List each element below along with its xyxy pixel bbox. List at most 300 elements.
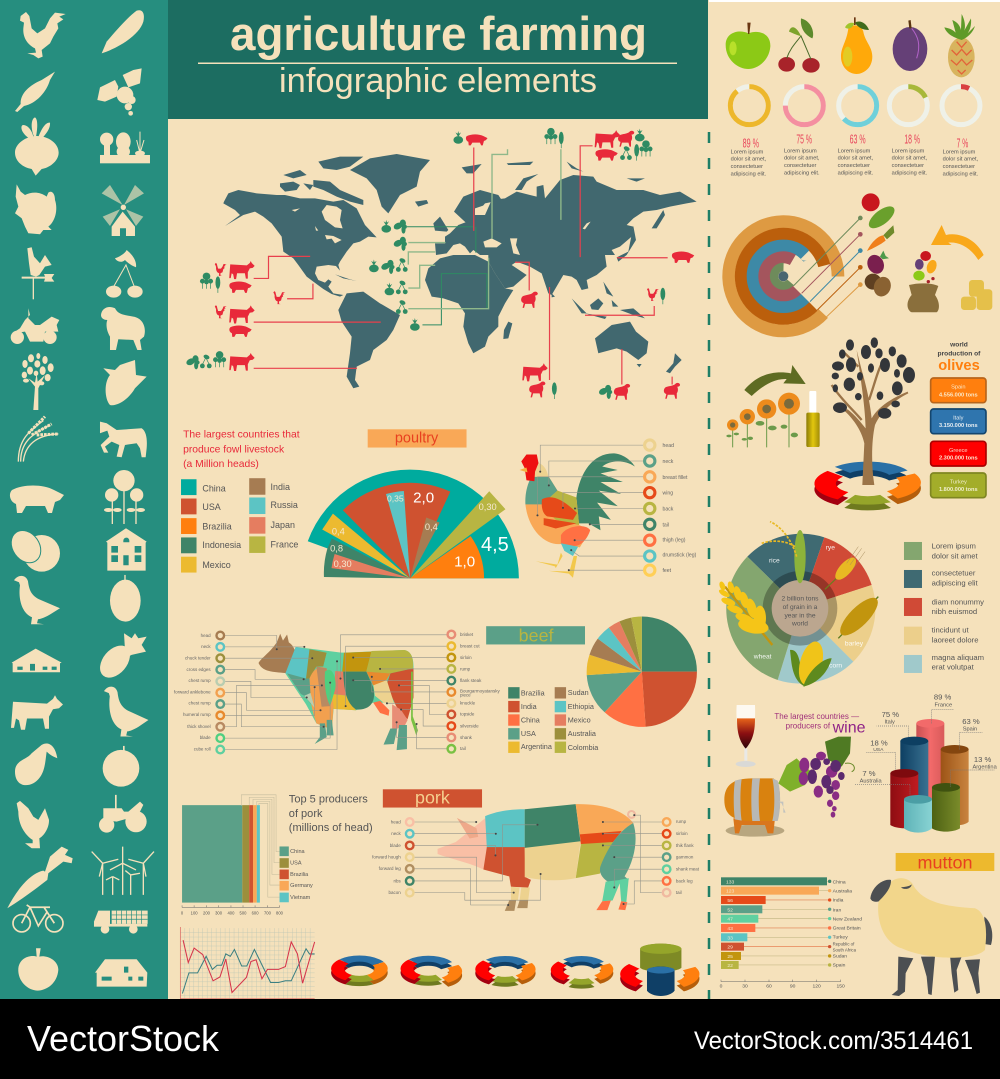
grain legend: consectetuer: [932, 569, 976, 578]
percent values: 63 %: [850, 133, 866, 147]
poultry fan chart: 0,8: [330, 544, 343, 554]
icon: green arrow: [744, 365, 806, 396]
icon: wheat ear: [15, 72, 55, 112]
mutton bar chart: 150: [836, 984, 845, 990]
wine cylinders chart: 75 %: [882, 710, 899, 719]
grain legend: laoreet dolore: [932, 635, 978, 644]
sidebar: farm icons: [0, 0, 168, 999]
grain legend: adipiscing elit: [932, 578, 978, 587]
poultry fan chart: 2,0: [413, 490, 434, 507]
footer logo: VectorStock: [27, 1018, 220, 1059]
mutton bar chart: 90: [790, 984, 796, 990]
icon: corn: [103, 360, 147, 405]
olives heading: [938, 342, 981, 374]
icon: grapes and leaves: [778, 737, 854, 818]
poultry fan chart: 0,35: [387, 493, 404, 503]
lorem captions: adipiscing elit.: [892, 170, 928, 176]
grain legend: magna aliquam: [932, 653, 984, 662]
lorem captions: dolor sit amet,: [943, 157, 979, 163]
mutton bar chart: Republic of: [833, 941, 855, 946]
olives stat: Greece: Greece: [949, 448, 968, 454]
pork section and bottom row: [180, 787, 701, 999]
icon: weathervane: [22, 247, 54, 299]
mutton bar chart: 56: [727, 898, 733, 904]
icon: tree: [22, 353, 54, 410]
cow cuts diagram: forward anklebone: [174, 690, 211, 695]
poultry fan chart: 0,4: [332, 526, 345, 536]
icon: pear: [15, 743, 57, 785]
percent values: 7 %: [957, 136, 968, 150]
pork stacked bar chart: 200: [203, 911, 211, 916]
icon: cottage: [95, 959, 147, 987]
cow cuts diagram: chest rump: [189, 701, 211, 706]
pork stacked bar chart: 700: [264, 911, 272, 916]
pork stacked bar chart: 300: [215, 911, 223, 916]
icon: sunflowers: [726, 393, 800, 447]
pork banner: [383, 787, 482, 808]
poultry section: [181, 429, 697, 578]
icon: wine glass: [736, 705, 756, 767]
mutton bar chart: South Africa: [833, 947, 857, 952]
icon: goose: [14, 576, 60, 624]
pork stacked bar chart: Brazilia: [290, 872, 309, 878]
lorem captions: dolor sit amet,: [731, 157, 767, 163]
poultry legend: France: [271, 539, 298, 549]
icon: cucumber: [102, 10, 144, 53]
icon: carrot: [7, 847, 73, 908]
grain wheel chart: world: [791, 621, 808, 628]
world map land: Europe, Africa, Asia, Australia: [425, 162, 697, 373]
pig cuts diagram: ribs: [394, 878, 402, 883]
icon: barn: [12, 649, 62, 672]
red livestock markers: [215, 130, 694, 400]
mutton bar chart: China: [833, 879, 846, 885]
grain legend: erat volutpat: [932, 663, 975, 672]
footer bar: [0, 999, 1000, 1079]
olives heading: production of: [938, 351, 981, 358]
icon: sunflowers: [104, 470, 145, 524]
lorem captions: adipiscing elit.: [784, 170, 820, 176]
cow cuts diagram: blade: [200, 735, 211, 740]
percent values: 75 %: [796, 133, 812, 147]
pig cuts diagram: shank meat: [676, 867, 700, 872]
beef banner: [486, 625, 585, 645]
lorem captions: Lorem ipsum: [892, 148, 925, 154]
green crop markers: [185, 128, 665, 399]
icon: green apple: [726, 23, 770, 69]
icon: gold coins: [961, 280, 992, 310]
poultry banner: [368, 429, 467, 448]
beef legend: Sudan: [568, 688, 589, 697]
mutton bar chart: 29: [727, 945, 733, 951]
grain wheel chart: 2 billion tons: [781, 596, 819, 603]
beef banner: beef: [519, 625, 554, 645]
cow cuts diagram: chest rump: [189, 678, 211, 683]
mutton bar chart: 123: [726, 889, 735, 895]
icon: grapes: [97, 68, 142, 116]
rooster cuts diagram: head: [662, 443, 674, 449]
grain legend: diam nonummy: [932, 597, 984, 606]
cow cuts diagram: rump: [460, 666, 471, 671]
grain wheel chart: corn: [829, 663, 842, 670]
percent values: [743, 133, 968, 150]
icon: wheat: [718, 581, 772, 645]
olives stat: Spain: 4.556.000 tons: [939, 392, 978, 398]
icon: sheep: [101, 307, 145, 350]
pork stacked bar chart: Vietnam: [290, 895, 311, 901]
olives stat: Turkey: 1.800.000 tons: [939, 487, 978, 493]
olives stat: Spain: [931, 378, 986, 403]
wine cylinders chart: 63 %: [962, 717, 980, 726]
wine cylinders chart: 18 %: [870, 739, 888, 748]
pig cuts diagram: neck: [391, 831, 401, 836]
olives stat: Turkey: Turkey: [950, 480, 967, 486]
rooster cuts diagram: back: [662, 507, 674, 513]
poultry heading text: [183, 430, 300, 470]
beef legend: India: [521, 702, 538, 711]
olives stat: Turkey: [931, 473, 986, 498]
mutton bar chart: Spain: [833, 962, 846, 968]
lorem captions: consectetuer: [943, 164, 975, 170]
beef legend: Argentina: [521, 742, 553, 751]
line chart: [180, 927, 315, 999]
icon: orange arrow: [931, 225, 984, 260]
pig cuts diagram: tail: [676, 890, 682, 895]
grain legend: [904, 542, 984, 673]
poultry fan chart: 0,30: [479, 502, 497, 512]
mutton bar chart: Sudan: [833, 954, 847, 960]
pork chart title: of pork: [289, 808, 323, 820]
cow cuts diagram: head: [201, 633, 211, 638]
subtitle: infographic elements: [279, 62, 597, 100]
icon: rice: [762, 522, 806, 583]
wine cylinders chart: France: [935, 702, 952, 708]
olives stat: Greece: [931, 441, 986, 466]
lorem captions: adipiscing elit.: [731, 171, 767, 177]
icon: duck: [104, 687, 148, 737]
pork stacked bar chart: Germany: [290, 883, 313, 889]
icon: turkey: [15, 184, 56, 234]
cow cuts diagram: knuckle: [460, 701, 476, 706]
cow cuts diagram: [174, 631, 500, 753]
grain legend: nibh euismod: [932, 607, 977, 616]
icon: olive tree: [832, 337, 915, 485]
icon: barrel: [724, 778, 786, 837]
percent values: 89 %: [743, 136, 759, 150]
icon: rice: [18, 417, 58, 462]
icon: bicycle: [13, 905, 63, 932]
cow cuts diagram: topside: [460, 712, 475, 717]
poultry legend: Russia: [271, 500, 298, 510]
pig cuts diagram: blade: [390, 843, 401, 848]
world map land: Americas: [223, 154, 430, 388]
pig cuts diagram: bacon: [389, 890, 401, 895]
pork banner: pork: [415, 787, 450, 807]
beef legend: Australia: [568, 729, 597, 738]
pig cuts diagram: [372, 804, 700, 911]
mutton bar chart: 22: [727, 963, 733, 969]
icon: turnip: [15, 117, 59, 176]
cow cuts diagram: brisket: [460, 632, 474, 637]
icon: cherries: [778, 18, 820, 73]
icon: cow: [11, 695, 63, 730]
pork stacked bar chart: USA: [290, 861, 302, 867]
icon: garden: [100, 132, 150, 163]
poultry legend: Mexico: [202, 560, 231, 570]
pork stacked bar chart: 400: [228, 911, 235, 916]
beef legend: Brazilia: [521, 688, 546, 697]
icon: horse: [100, 422, 147, 457]
rooster cuts diagram: thigh (leg): [662, 538, 686, 544]
green connector lines: [407, 227, 487, 325]
wine cylinders chart: USA: [873, 747, 884, 753]
lorem captions: consectetuer: [892, 163, 924, 169]
pig cuts diagram: rump: [676, 819, 687, 824]
3D ring chart 2: [398, 955, 463, 989]
mutton bar chart: 60: [766, 984, 772, 990]
mutton bar chart: 133: [726, 879, 735, 885]
icon: rooster: [20, 12, 66, 58]
icon: rye: [825, 547, 865, 589]
poultry legend: [181, 478, 298, 573]
poultry banner: poultry: [395, 431, 439, 447]
beef legend: USA: [521, 729, 536, 738]
beef legend: Colombia: [568, 743, 599, 752]
icon: pineapple: [944, 14, 975, 77]
icon: windmill: [102, 185, 144, 236]
icon: vegetables: [862, 193, 898, 299]
vegetable target chart: [706, 199, 863, 354]
rooster cuts diagram: neck: [662, 459, 674, 465]
olive section: [718, 337, 986, 688]
beef section: [174, 617, 697, 753]
olives heading: olives: [938, 358, 980, 374]
cow cuts diagram: humeral rump: [183, 712, 211, 717]
lorem captions: [731, 148, 979, 177]
icon: pear: [841, 17, 872, 74]
wine cylinders chart: Spain: [963, 726, 977, 732]
pork stacked bar chart: 800: [276, 911, 284, 916]
mutton bar chart: 33: [727, 935, 733, 941]
olives heading: world: [949, 342, 968, 349]
icon: plum: [893, 20, 927, 71]
rooster cuts diagram: tail: [662, 522, 669, 528]
wine cylinders chart: Australia: [860, 778, 883, 784]
icon: apple: [18, 948, 58, 991]
3D ring chart with columns: [619, 944, 701, 996]
beef pie chart: [587, 617, 697, 727]
mutton bar chart: 25: [727, 954, 733, 960]
pig cuts diagram: thik flank: [676, 843, 694, 848]
cow cuts diagram: chuck tender: [185, 656, 211, 661]
pig cuts diagram: forward leg: [379, 866, 401, 871]
wine cylinders chart: [854, 692, 998, 833]
3D ring chart 1: [329, 954, 390, 987]
pig cuts diagram: head: [391, 819, 401, 824]
lorem captions: adipiscing elit.: [838, 170, 874, 176]
lorem captions: Lorem ipsum: [784, 148, 817, 154]
3D ring chart 3: [474, 955, 537, 987]
icon: corn: [790, 639, 832, 688]
cow cuts diagram: shank: [460, 735, 473, 740]
cow cuts diagram: cross edges: [187, 667, 211, 672]
cow cuts diagram: cube roll: [194, 747, 211, 752]
lorem captions: Lorem ipsum: [731, 149, 764, 155]
mutton bar chart: 120: [812, 984, 821, 990]
pork stacked bar chart: 0: [181, 911, 184, 916]
pork stacked bar chart: 600: [252, 911, 259, 916]
grain wheel chart: year in the: [784, 612, 816, 619]
mutton bar chart: New Zealand: [833, 916, 862, 922]
icon: truck: [94, 911, 148, 934]
olive ring base: [812, 460, 923, 511]
pork stacked bar chart: 500: [240, 911, 247, 916]
poultry legend: India: [271, 482, 290, 492]
rooster cuts diagram: wing: [662, 491, 673, 497]
icon: cherries: [106, 250, 143, 298]
pork chart title: [289, 793, 373, 834]
poultry heading text: produce fowl livestock: [183, 444, 285, 455]
pig cuts diagram: forward hough: [372, 855, 401, 860]
pig cuts diagram: gammon: [676, 855, 694, 860]
icon: plum: [110, 575, 141, 622]
icon: tractor: [99, 795, 147, 833]
icon: sack of produce: [908, 251, 939, 312]
mutton bar chart: 52: [727, 907, 733, 913]
grain legend: Lorem ipsum: [932, 542, 976, 551]
3D ring chart 4: [550, 955, 615, 989]
mutton bar chart: 43: [727, 926, 733, 932]
lorem captions: adipiscing elit.: [943, 171, 979, 177]
lorem captions: Lorem ipsum: [838, 148, 871, 154]
cow cuts diagram: breast cut: [460, 644, 480, 649]
mutton bar chart: Iran: [833, 907, 841, 913]
grain wheel chart: of grain in a: [783, 604, 818, 611]
poultry heading text: The largest countries that: [183, 430, 300, 441]
mutton bar chart: [720, 877, 862, 990]
rooster cuts diagram: drumstick (leg): [662, 553, 697, 559]
icon: orange: [103, 746, 139, 787]
right panel: fruit percentages: [706, 14, 992, 354]
wine heading: wine: [832, 720, 866, 737]
cow cuts diagram: thick shovel: [187, 724, 211, 729]
lorem captions: consectetuer: [731, 164, 763, 170]
grain wheel chart: [718, 522, 883, 688]
poultry legend: USA: [202, 502, 221, 512]
poultry heading text: (a Million heads): [183, 459, 259, 470]
grain wheel chart: barley: [845, 640, 864, 647]
pig cuts diagram: back leg: [676, 878, 693, 883]
icon: pineapple: [94, 633, 147, 683]
mutton banner: mutton: [917, 852, 972, 872]
beef legend: China: [521, 715, 541, 724]
lorem captions: Lorem ipsum: [943, 149, 976, 155]
rooster cuts diagram: [520, 440, 697, 578]
red connector lines: [254, 146, 672, 384]
grain wheel chart: wheat: [753, 653, 772, 660]
grain legend: dolor sit amet: [932, 551, 978, 560]
lorem captions: dolor sit amet,: [892, 156, 928, 162]
icon: scooter: [11, 308, 59, 344]
lorem captions: consectetuer: [784, 163, 816, 169]
grain wheel chart: rye: [826, 544, 835, 551]
grain wheel chart: rice: [769, 557, 780, 564]
pork stacked bar chart: China: [290, 849, 306, 855]
mutton bar chart: Turkey: [833, 935, 848, 941]
poultry legend: Brazilia: [202, 522, 232, 532]
wine cylinders chart: Italy: [884, 719, 895, 725]
poultry legend: China: [202, 483, 226, 493]
wine cylinders chart: Argentina: [973, 764, 998, 770]
poultry fan chart: 0,4: [425, 522, 438, 532]
pork stacked bar chart: [181, 795, 313, 916]
cow cuts diagram: Bourgarmoyatansky: [460, 688, 500, 693]
cow cuts diagram: sirloin: [460, 655, 472, 660]
cow cuts diagram: tail: [460, 746, 466, 751]
icon: potatoes: [5, 525, 60, 572]
header band: [168, 0, 708, 119]
poultry fan chart: 1,0: [454, 554, 475, 571]
world map markers and connectors: [185, 128, 694, 400]
wine heading: [774, 712, 866, 737]
grain legend: tincidunt ut: [932, 626, 970, 635]
beef legend: [508, 687, 599, 753]
pork stacked bar chart: 100: [191, 911, 198, 916]
mutton bar chart: Australia: [833, 889, 852, 895]
pork chart title: (millions of head): [289, 822, 373, 834]
poultry fan chart: 0,30: [334, 559, 352, 569]
olives stat: Italy: [931, 409, 986, 434]
cow cuts diagram: silverside: [460, 723, 479, 728]
cow cuts diagram: flank steak: [460, 678, 482, 683]
mutton bar chart: 47: [727, 917, 733, 923]
rooster cuts diagram: feet: [662, 568, 672, 574]
title: agriculture farming: [230, 7, 647, 60]
poultry legend: Japan: [271, 520, 295, 530]
icon: pig: [10, 485, 64, 513]
pork chart title: Top 5 producers: [289, 793, 368, 805]
icon: wind turbines: [92, 847, 154, 895]
wine cylinders chart: 89 %: [934, 692, 952, 701]
lorem captions: dolor sit amet,: [784, 156, 820, 162]
icon: house: [106, 528, 147, 571]
wine heading: producers of: [786, 722, 831, 731]
icon: barley: [835, 592, 883, 641]
poultry fan chart: [308, 470, 519, 578]
mutton bar chart: Great Britain: [833, 926, 861, 932]
poultry fan chart: 4,5: [481, 534, 509, 556]
pig cuts diagram: sirloin: [676, 831, 688, 836]
olives stat: Spain: Spain: [951, 385, 966, 391]
mutton bar chart: India: [833, 898, 844, 904]
wine and mutton section: [720, 692, 998, 996]
rooster cuts diagram: breast fillet: [662, 475, 688, 481]
cow cuts diagram: neck: [201, 644, 211, 649]
mutton banner: [896, 852, 994, 872]
olives stat: Italy: 3.150.000 tons: [939, 423, 978, 429]
icon: oil bottle: [806, 391, 820, 447]
wine cylinders chart: 13 %: [974, 755, 992, 764]
icon: sheep: [870, 878, 992, 996]
beef legend: Ethiopia: [568, 702, 595, 711]
mutton bar chart: 0: [720, 984, 723, 990]
poultry legend: Indonesia: [202, 540, 241, 550]
olives stat: Greece: 2.300.000 tons: [939, 455, 978, 461]
lorem captions: dolor sit amet,: [838, 156, 874, 162]
lorem captions: consectetuer: [838, 163, 870, 169]
percent values: 18 %: [904, 133, 920, 147]
icon: hen: [17, 801, 49, 848]
